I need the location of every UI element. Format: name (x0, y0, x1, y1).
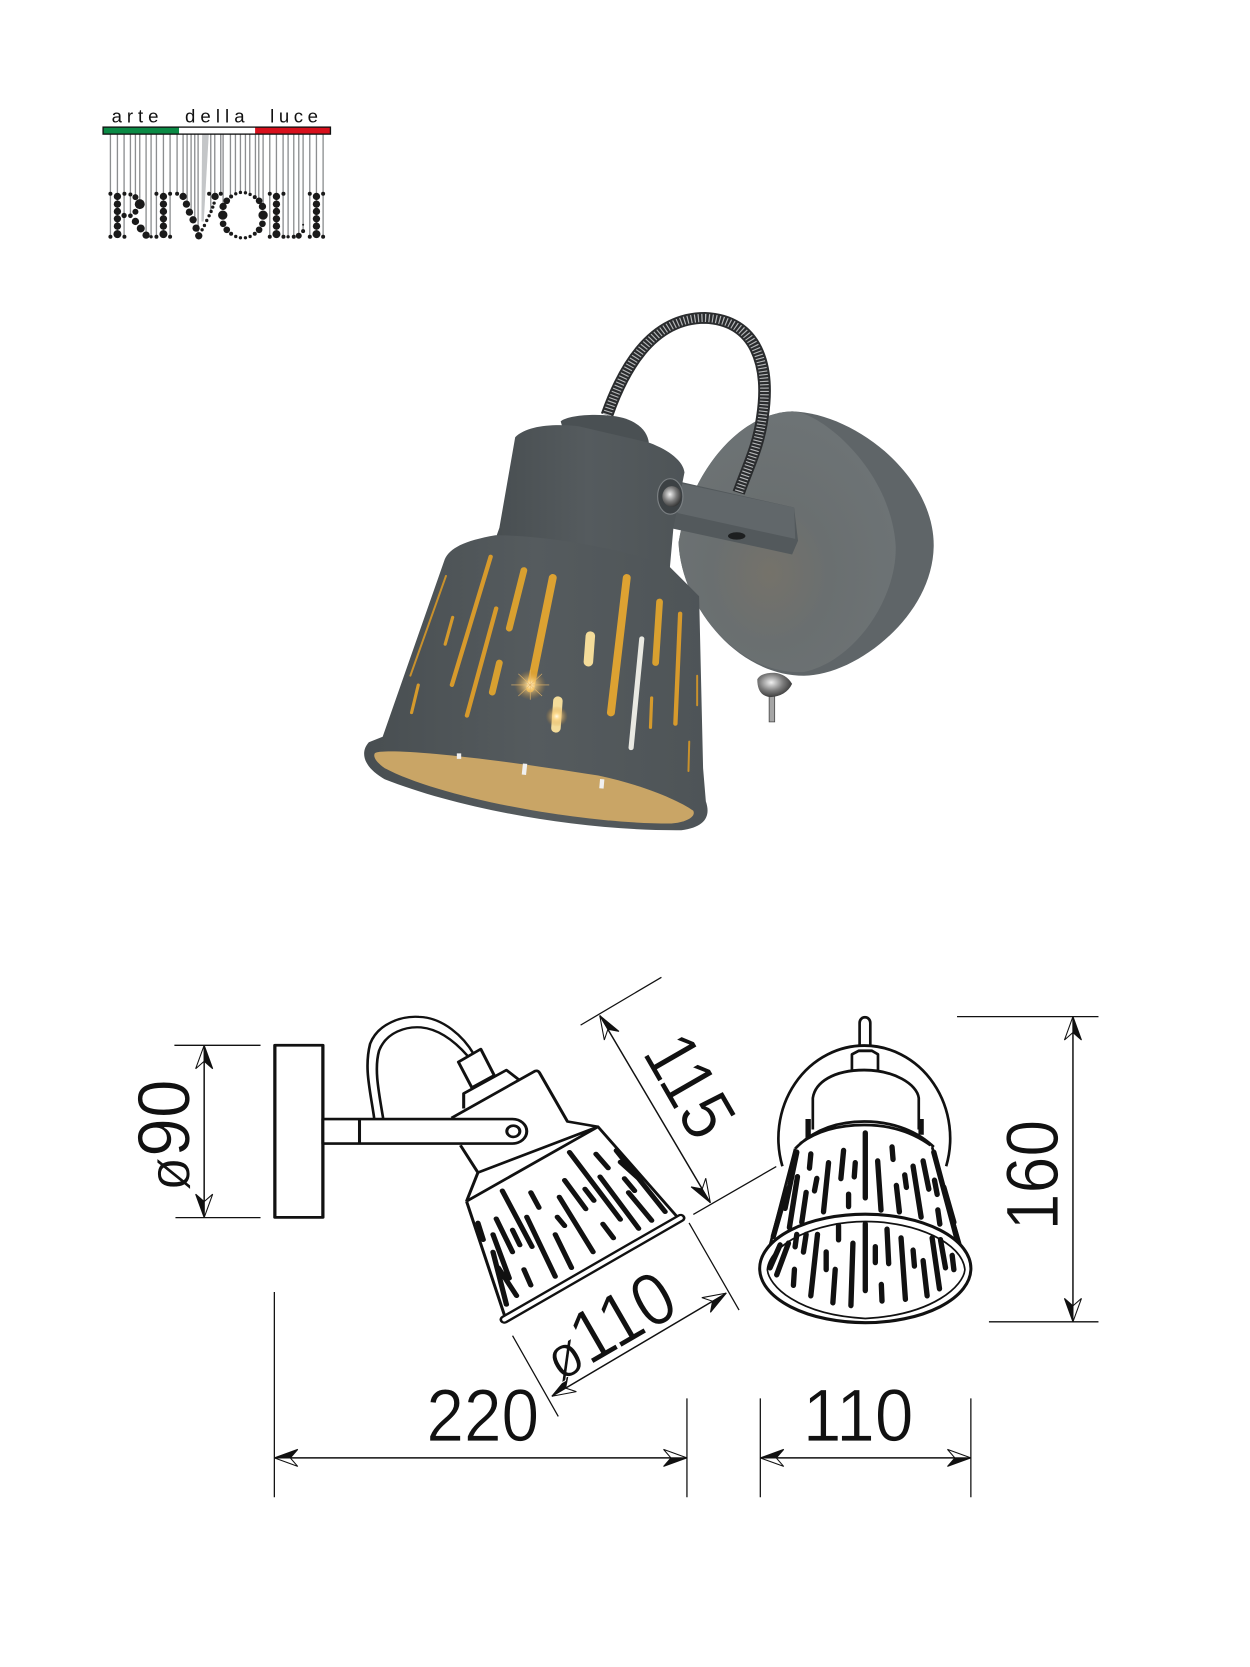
flexible arm (368, 1017, 474, 1118)
dimension: 220 (274, 1292, 687, 1497)
pivot screw (658, 479, 683, 514)
rim ellipses (760, 1214, 971, 1323)
pull switch (757, 673, 792, 722)
shade slots lower (770, 1224, 954, 1306)
shade slots (478, 1151, 665, 1304)
light sparkles (511, 670, 568, 727)
dimension: 160 (957, 1017, 1098, 1322)
logo wordmark dots: RIVOLI (108, 191, 325, 239)
logo: Rivoli arte della luce (103, 105, 330, 239)
shade body (364, 535, 708, 830)
shade collar (795, 1121, 934, 1149)
logo hanging lines (110, 134, 323, 236)
technical drawing: side view (275, 1017, 681, 1320)
shade knob (561, 415, 649, 443)
dimension: 160: 160 (991, 1120, 1074, 1230)
wall plate side (275, 1045, 323, 1217)
dimension: 110: 110 (803, 1374, 913, 1457)
dimension: diameter 110: ø110 (527, 1254, 690, 1396)
dimension: diameter 90 (122, 1045, 261, 1218)
shade gold interior (374, 751, 694, 824)
technical drawing: front view (760, 1017, 971, 1323)
shade slots (410, 557, 697, 788)
dimension: 115: 115 (627, 1019, 752, 1153)
top pin (860, 1017, 870, 1046)
shade body (467, 1127, 677, 1315)
dimension: 110 (760, 1374, 971, 1497)
shade neck (451, 1071, 598, 1201)
lamp socket and cap (458, 1049, 519, 1109)
shade neck (491, 425, 684, 572)
logo tagline (112, 105, 318, 126)
dimension: 220: 220 (426, 1374, 539, 1457)
shade slots upper (773, 1133, 957, 1240)
wall plate (679, 411, 934, 676)
socket (852, 1051, 878, 1070)
logo tagline: luce (270, 105, 318, 126)
neck brackets (808, 1119, 921, 1138)
shade neck (813, 1070, 919, 1130)
shade rim (504, 1218, 681, 1320)
dimension: diameter 90: ø90 (122, 1079, 205, 1191)
dimension: diameter 110 (513, 1223, 739, 1416)
lamp arm (664, 478, 798, 554)
logo tagline: della (185, 105, 245, 126)
dimension: 115 (581, 977, 776, 1214)
logo tagline: arte (112, 105, 158, 126)
flexible gooseneck (607, 318, 764, 493)
logo tricolour bar (103, 127, 330, 134)
product photo: grey wall lamp (364, 318, 934, 830)
support arm (323, 1119, 527, 1144)
shade sides (770, 1147, 961, 1245)
wall plate circle (778, 1046, 950, 1166)
